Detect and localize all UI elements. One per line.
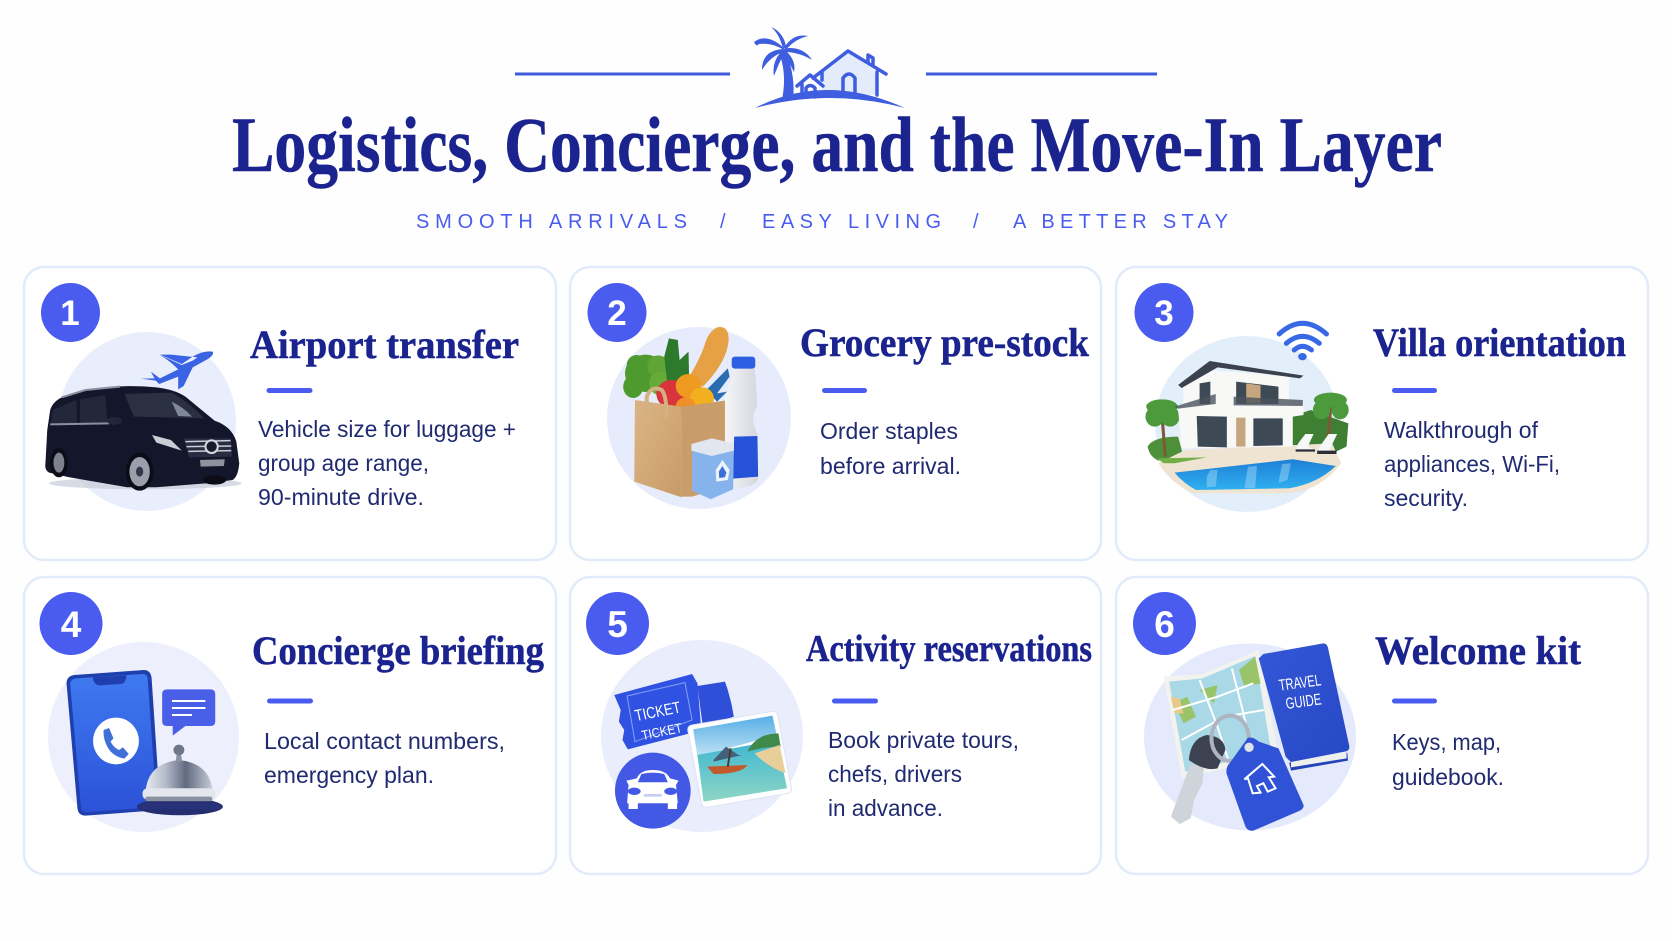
heading: Airport transfer (250, 322, 519, 367)
body text: in advance. (828, 795, 943, 821)
body text: Local contact numbers, (264, 728, 505, 754)
bottle (725, 367, 758, 488)
badge 2: 2 (607, 294, 627, 333)
illustration backdrop circle (607, 327, 791, 509)
body text (1392, 729, 1504, 790)
subtitle: / (720, 211, 726, 233)
panel: welcome kit (1116, 577, 1648, 874)
emblem right rule (926, 72, 1157, 76)
body text (264, 728, 505, 788)
badge 3 (1134, 283, 1194, 342)
body text: guidebook. (1392, 764, 1504, 790)
icon: beach photo (688, 711, 791, 807)
illustration backdrop circle (601, 640, 803, 832)
panel: grocery pre-stock (570, 267, 1101, 560)
sun loungers (1296, 434, 1337, 452)
body text (820, 418, 961, 479)
icon: travel guide book: TRAVEL (1278, 671, 1322, 695)
illustration backdrop circle (1144, 644, 1356, 830)
garden and palms (1145, 393, 1349, 461)
badge 6 (1133, 592, 1196, 655)
body text (1384, 417, 1560, 511)
emblem left rule (515, 72, 730, 76)
badge 2 (588, 283, 646, 342)
body text: emergency plan. (264, 762, 434, 788)
heading: Villa orientation (1373, 320, 1626, 365)
paper bag (681, 401, 725, 497)
accent dash (266, 388, 312, 393)
body text (258, 416, 516, 510)
badge 5 (586, 592, 649, 655)
illustration: grocery bag (623, 327, 758, 499)
title: Logistics, Concierge, and the Move-In Layer (232, 101, 1442, 188)
badge 4 (40, 592, 102, 655)
accent dash (1392, 698, 1437, 704)
body text: 90-minute drive. (258, 484, 424, 510)
icon: tickets: TICKET (640, 720, 684, 743)
illustration backdrop circle (58, 332, 236, 511)
icon: key (1171, 716, 1249, 824)
windows (1197, 382, 1283, 447)
accent dash (1392, 388, 1437, 393)
panel: concierge briefing (24, 577, 556, 874)
illustration backdrop circle (48, 642, 239, 832)
panel: villa orientation (1116, 267, 1648, 560)
badge 1: 1 (60, 294, 80, 333)
body text (828, 727, 1019, 821)
panel: activity reservations (570, 577, 1101, 874)
subtitle: EASY LIVING (762, 211, 941, 233)
icon: car badge (615, 753, 691, 829)
body text: Order staples (820, 418, 958, 444)
body text: group age range, (258, 450, 429, 476)
icon: travel guide book: GUIDE (1284, 690, 1323, 713)
heading: Welcome kit (1375, 628, 1582, 673)
icon: house (797, 51, 886, 97)
icon: plane (141, 351, 213, 389)
icon: house tag (1226, 737, 1304, 831)
icon: service bell (137, 745, 223, 815)
icon: phone (67, 670, 160, 816)
icon: speech bubble (162, 689, 215, 736)
badge 1 (41, 283, 100, 342)
illustration: map, guidebook, keys (1164, 643, 1349, 831)
icon: back ticket (697, 682, 734, 727)
badge 3: 3 (1154, 294, 1174, 333)
subtitle: A BETTER STAY (1013, 211, 1228, 233)
header emblem: palm tree and house (515, 27, 1157, 108)
body text: Book private tours, (828, 727, 1019, 753)
subtitle: / (973, 211, 979, 233)
icon: van (45, 386, 242, 491)
greens (623, 338, 689, 398)
subtitle (416, 211, 1228, 233)
accent dash (832, 698, 878, 704)
heading: Concierge briefing (252, 628, 544, 673)
subtitle: SMOOTH ARRIVALS (416, 211, 687, 233)
illustration backdrop circle (1155, 336, 1339, 512)
body text: chefs, drivers (828, 761, 962, 787)
panel: airport transfer (24, 267, 556, 560)
heading: Grocery pre-stock (800, 320, 1090, 365)
icon: tickets (614, 674, 703, 749)
body text: Walkthrough of (1384, 417, 1539, 443)
pool (1175, 459, 1336, 490)
illustration: tickets, car and photo (614, 674, 791, 829)
body text: Keys, map, (1392, 729, 1501, 755)
body text: appliances, Wi-Fi, (1384, 451, 1560, 477)
accent dash (822, 388, 867, 393)
icon: tickets: TICKET (633, 698, 682, 725)
badge 5: 5 (607, 604, 628, 645)
deck (1158, 443, 1341, 493)
icon: wifi (1279, 323, 1326, 360)
body text: security. (1384, 485, 1468, 511)
badge 4: 4 (61, 604, 82, 645)
icon: travel guide book (1259, 643, 1349, 771)
illustration: plane and van (45, 351, 242, 491)
produce (656, 368, 730, 416)
body text: Vehicle size for luggage + (258, 416, 516, 442)
heading: Activity reservations (806, 628, 1092, 670)
baguette (689, 327, 729, 387)
accent dash (267, 698, 313, 704)
illustration: villa with pool (1145, 323, 1349, 493)
icon: hill (755, 90, 905, 108)
roof (1178, 361, 1304, 388)
villa walls (1178, 370, 1304, 448)
body text: before arrival. (820, 453, 961, 479)
canister (692, 450, 734, 499)
illustration: phone and bell (67, 670, 223, 816)
icon: palm tree (754, 27, 812, 100)
badge 6: 6 (1154, 604, 1175, 645)
icon: map (1164, 650, 1278, 778)
